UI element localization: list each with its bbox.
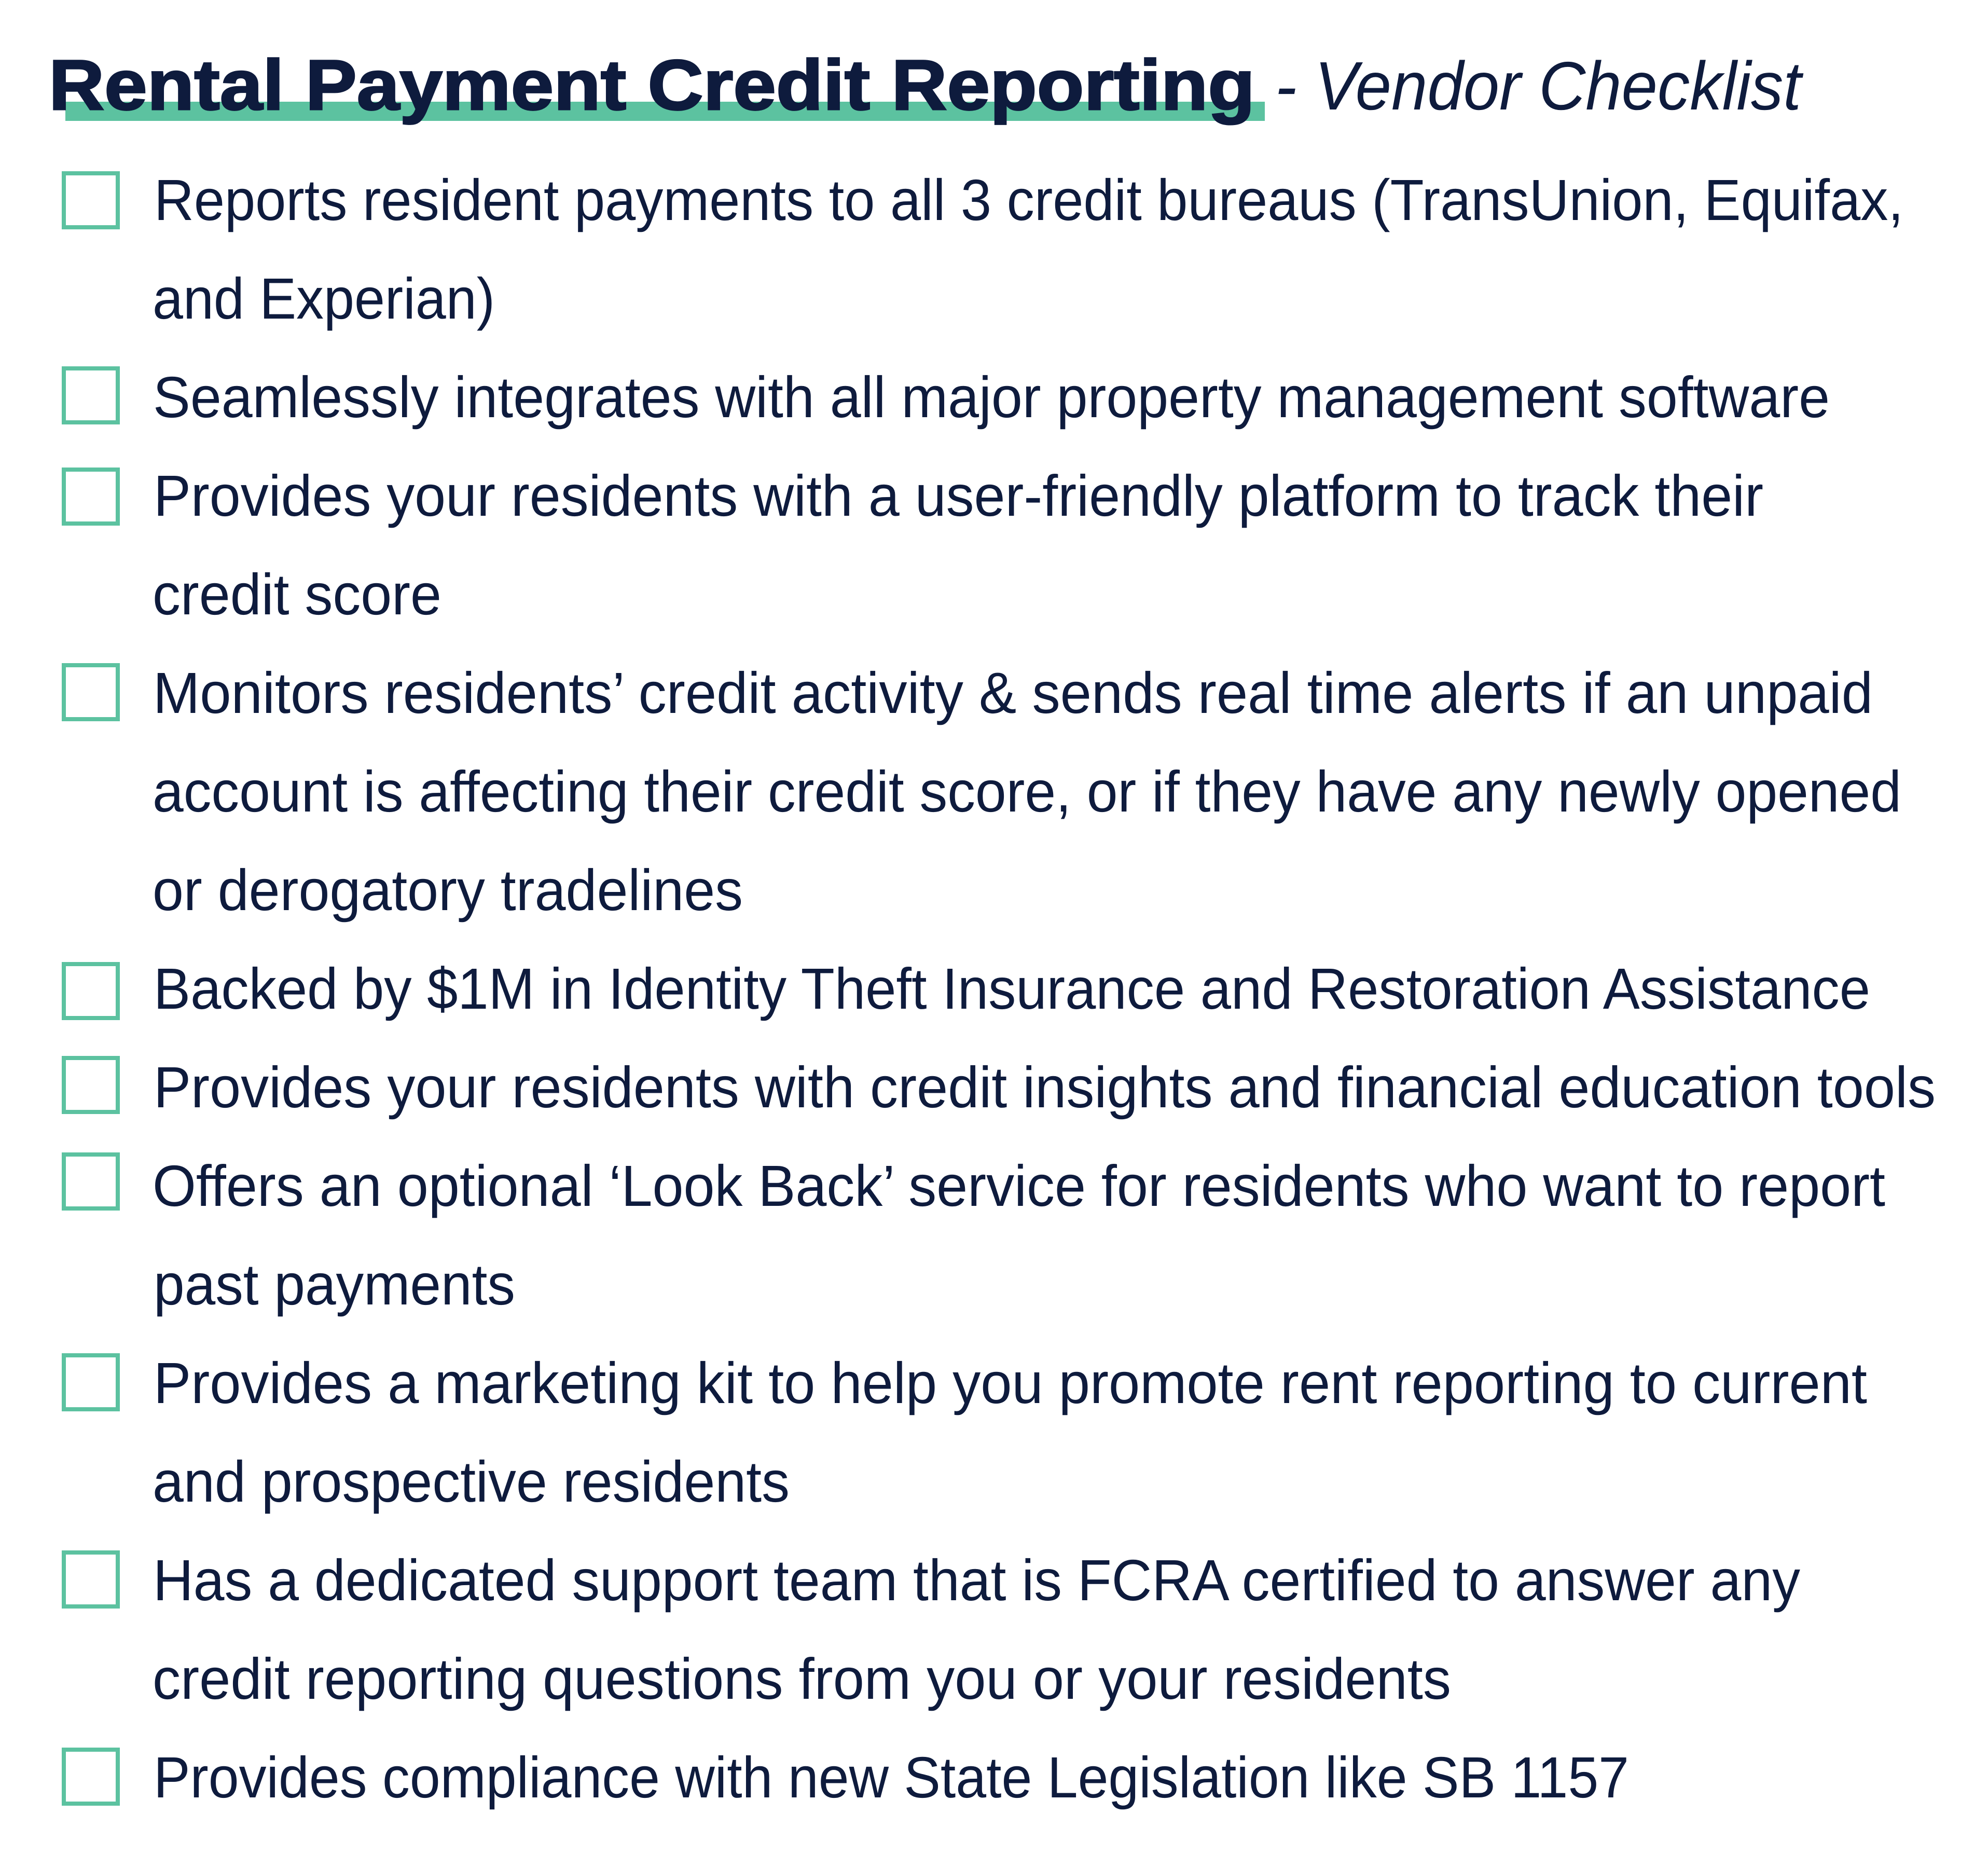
checklist item 4: Monitors residents’ credit activity & sends real time alerts if an unpaid [153,661,1873,725]
subtitle: Vendor Checklist: - Vendor Checklist [1275,48,1804,124]
checklist item 1: Reports resident payments to all 3 credit bureaus (TransUnion, Equifax, [154,168,1903,232]
checklist item 9: credit reporting questions from you or your residents [153,1646,1451,1711]
checklist item 8: and prospective residents [153,1449,790,1514]
checklist item 8 [64,1351,1867,1514]
checklist item 7: past payments [154,1252,515,1317]
checklist item 9: Has a dedicated support team that is FCRA certified to answer any [153,1548,1800,1613]
checklist item 7: Offers an optional ‘Look Back’ service for residents who want to report [153,1153,1885,1218]
checklist item 4 [64,661,1901,923]
checklist item 1 [64,168,1903,331]
checklist item 9 [64,1548,1800,1711]
checklist item 4: account is affecting their credit score, or if they have any newly opened [153,759,1901,824]
title: Rental Payment Credit Reporting: Rental Payment Credit Reporting [49,46,1255,125]
checklist item 10: Provides compliance with new State Legislation like SB 1157 [154,1745,1629,1810]
checklist item 2: Seamlessly integrates with all major property management software [153,365,1830,430]
title: green highlight bar [65,102,1265,121]
checklist item 3: credit score [153,562,441,627]
checklist item 1: and Experian) [153,266,495,331]
checklist item 8: Provides a marketing kit to help you promote rent reporting to current [154,1351,1867,1416]
checklist item 5: Backed by $1M in Identity Theft Insurance and Restoration Assistance [154,956,1870,1021]
checklist item 3 [64,463,1763,627]
checklist item 3: Provides your residents with a user-friendly platform to track their [154,463,1763,528]
checklist item 7 [64,1153,1885,1317]
checklist item 4: or derogatory tradelines [153,858,743,923]
checklist item 6: Provides your residents with credit insights and financial education tools [154,1055,1936,1120]
